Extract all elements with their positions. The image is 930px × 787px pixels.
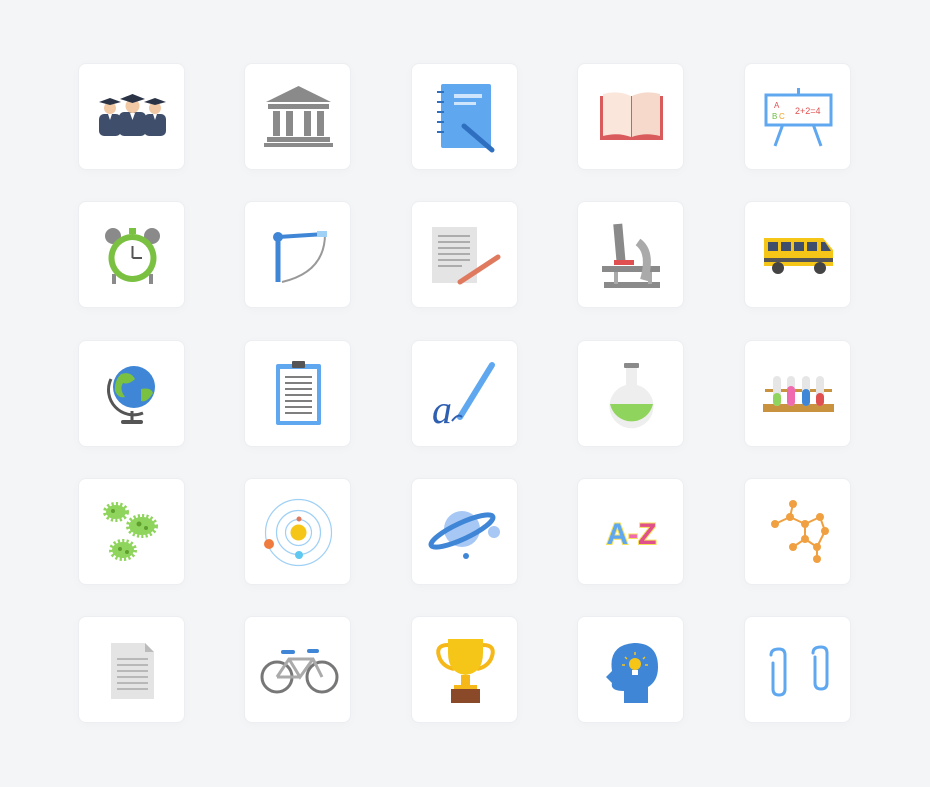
icon card: A-Z — [577, 478, 684, 585]
icon card: paper document — [78, 616, 185, 723]
icon card: molecule — [744, 478, 851, 585]
icon card: A-Z: A-Z — [606, 518, 656, 551]
icon card: handwriting: a — [432, 387, 452, 432]
icon card: easel board: B — [772, 112, 777, 121]
icon card: test tubes — [744, 340, 851, 447]
icon card: paper clips — [744, 616, 851, 723]
icon card: easel board: 2+2=4 — [795, 106, 821, 116]
icon card: compass drawing — [244, 201, 351, 308]
icon card: open book — [577, 63, 684, 170]
icon card: solar system — [244, 478, 351, 585]
icon card: bank building — [244, 63, 351, 170]
icon card: document and pencil — [411, 201, 518, 308]
icon card: easel board — [744, 63, 851, 170]
icon card: clipboard — [244, 340, 351, 447]
icon card: school bus — [744, 201, 851, 308]
icon card: bicycle — [244, 616, 351, 723]
icon card: easel board: A — [774, 101, 780, 110]
icon card: notebook — [411, 63, 518, 170]
icon card: graduates — [78, 63, 185, 170]
icon card: trophy — [411, 616, 518, 723]
icon card: easel board: C — [779, 112, 785, 121]
icon card: planet — [411, 478, 518, 585]
icon card: alarm clock — [78, 201, 185, 308]
icon card: globe — [78, 340, 185, 447]
icon card: flask — [577, 340, 684, 447]
icon card: handwriting — [411, 340, 518, 447]
icon card: idea head — [577, 616, 684, 723]
icon card: bacteria — [78, 478, 185, 585]
icon card: microscope — [577, 201, 684, 308]
